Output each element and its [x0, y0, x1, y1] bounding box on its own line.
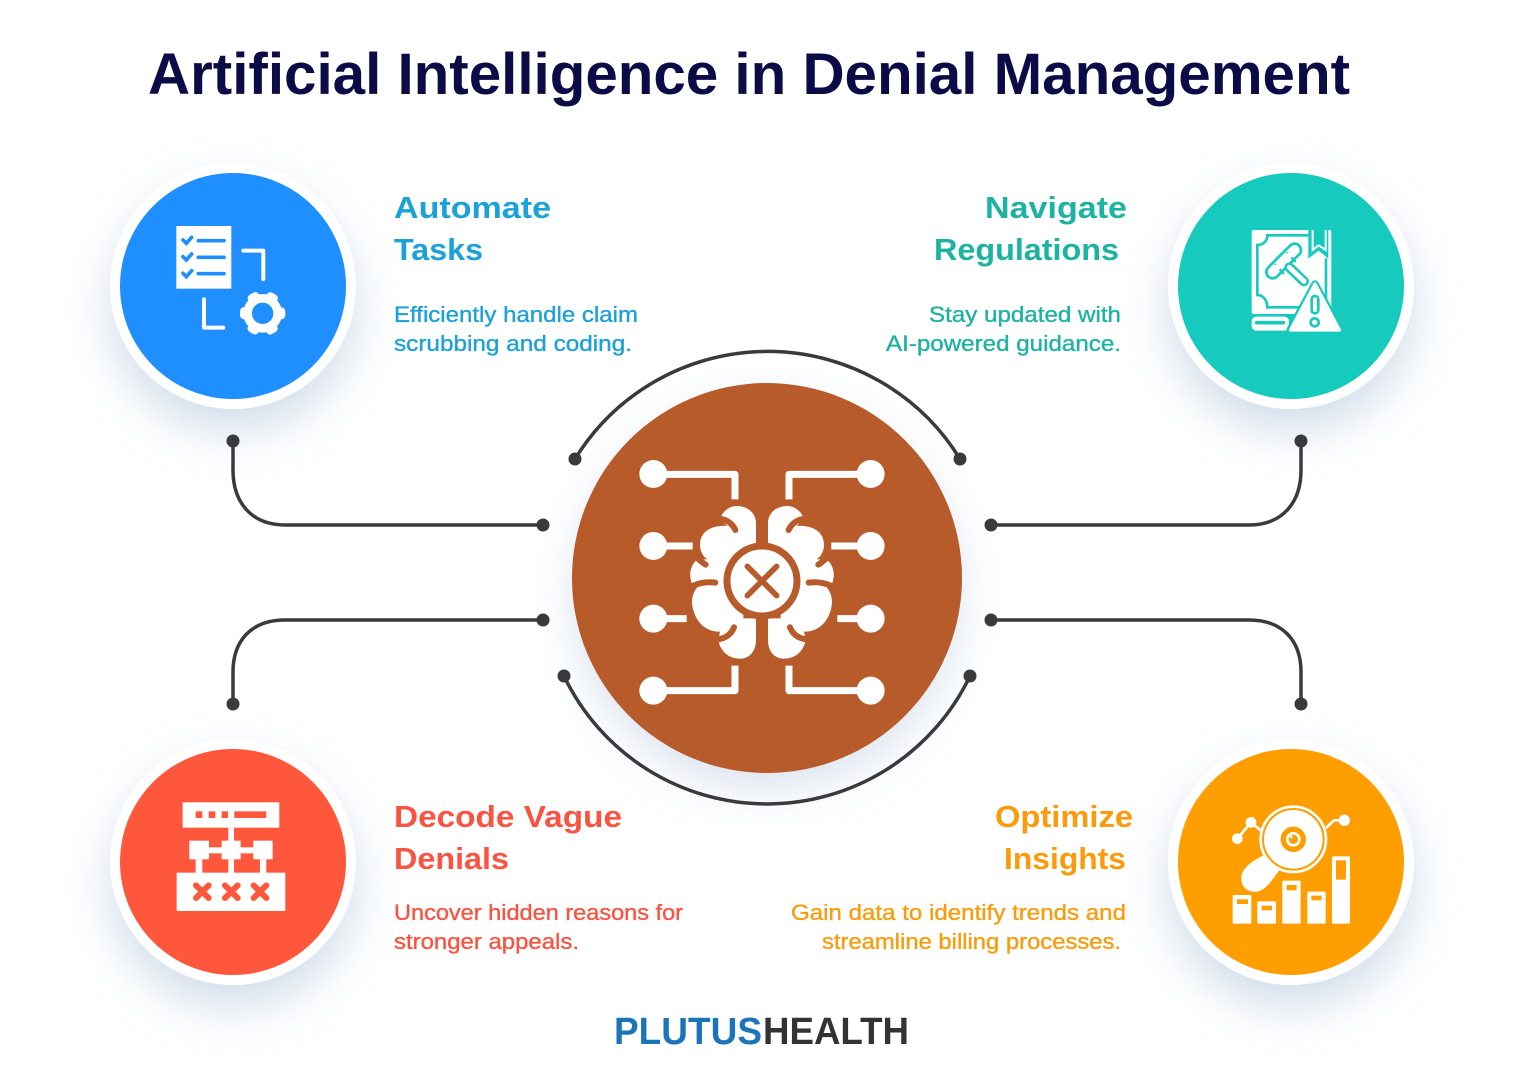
- panel: navigate regulations icon circle: [1168, 163, 1414, 430]
- connector: optimize insights to centre: [984, 614, 1308, 710]
- panel: decode vague denials icon circle: [110, 739, 356, 1006]
- connector: decode vague denials to centre: [226, 614, 550, 710]
- text: decode vague denials: Decode Vague: [394, 799, 622, 834]
- text: optimize insights: Insights: [1004, 841, 1126, 876]
- connector: navigate regulations to centre: [984, 434, 1308, 532]
- icon: brain with circuit nodes: [639, 460, 885, 705]
- text: automate tasks: Tasks: [394, 232, 483, 267]
- title: Artificial Intelligence in Denial Management: [148, 42, 1350, 107]
- text: decode vague denials: Denials: [394, 841, 509, 876]
- centre circle with brain icon: [572, 383, 962, 786]
- icon: magnifier over bar chart: [1232, 807, 1350, 924]
- text: navigate regulations: Stay updated with: [929, 302, 1121, 327]
- text: automate tasks: [394, 190, 638, 356]
- logo: Plutus Health: [614, 1011, 909, 1053]
- text: navigate regulations: Regulations: [934, 232, 1119, 267]
- text: navigate regulations: Navigate: [985, 190, 1127, 225]
- text: decode vague denials: [394, 799, 683, 954]
- connector: automate tasks to centre: [226, 434, 550, 532]
- text: optimize insights: Optimize: [995, 799, 1133, 834]
- icon: denial flow diagram: [177, 802, 285, 911]
- text: navigate regulations: AI-powered guidance.: [886, 331, 1121, 356]
- text: navigate regulations: [886, 190, 1127, 356]
- text: automate tasks: Efficiently handle claim: [394, 302, 638, 327]
- text: optimize insights: streamline billing processes.: [822, 929, 1121, 954]
- arc above centre circle: [568, 351, 966, 466]
- text: optimize insights: Gain data to identify trends and: [791, 900, 1126, 925]
- panel: automate tasks icon circle: [110, 163, 356, 430]
- logo: Plutus Health: PLUTUS: [614, 1011, 762, 1053]
- text: automate tasks: Automate: [394, 190, 551, 225]
- icon: checklist and gear: [176, 226, 284, 334]
- arc below centre circle: [558, 670, 976, 804]
- logo: Plutus Health: HEALTH: [763, 1011, 909, 1053]
- text: decode vague denials: Uncover hidden reasons for: [394, 900, 683, 925]
- text: automate tasks: scrubbing and coding.: [394, 331, 632, 356]
- text: decode vague denials: stronger appeals.: [394, 929, 579, 954]
- icon: law book with gavel and warning: [1250, 228, 1340, 331]
- panel: optimize insights icon circle: [1168, 739, 1414, 1006]
- text: optimize insights: [791, 799, 1133, 954]
